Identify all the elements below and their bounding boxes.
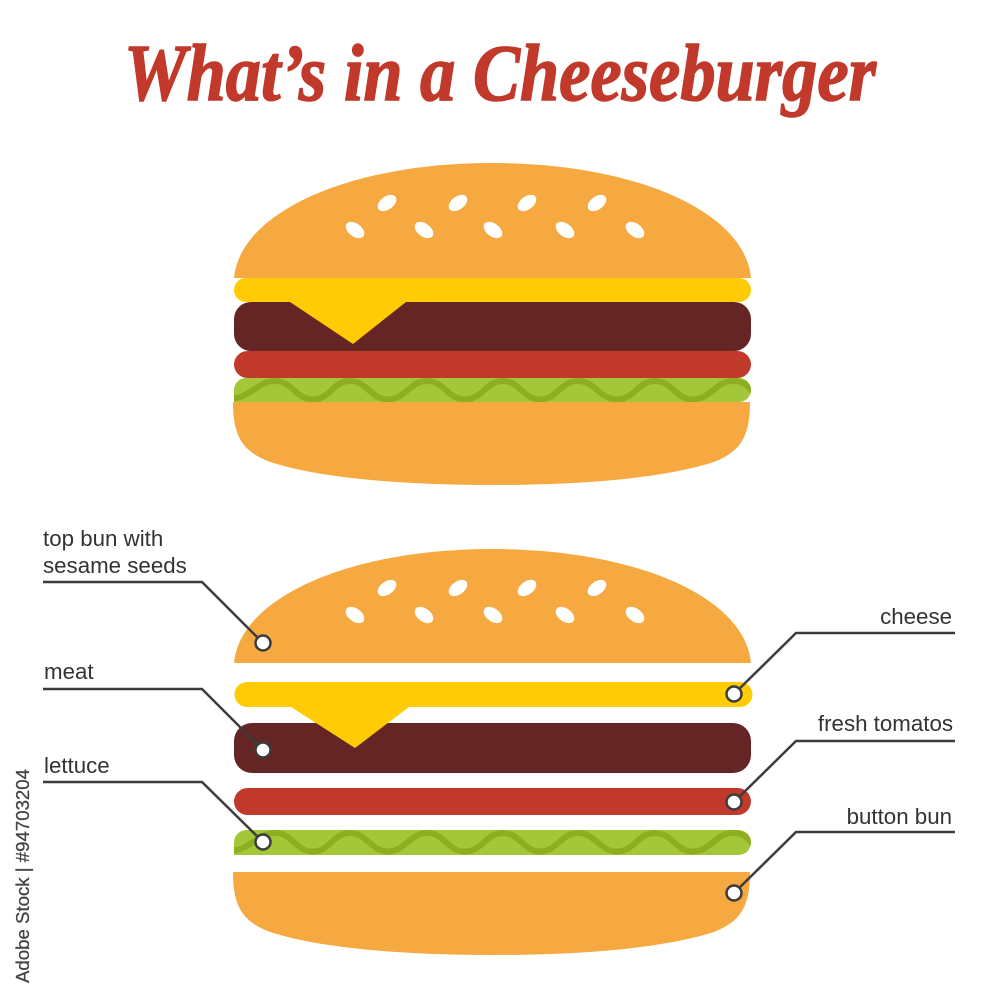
vertical credit line: Adobe Stock | #94703204	[13, 769, 33, 983]
callout: meat	[43, 659, 270, 758]
top bun with seeds	[234, 549, 751, 663]
callout: lettuce	[43, 753, 270, 850]
callout: fresh tomatos: fresh tomatos	[818, 711, 953, 736]
assembled burger	[230, 163, 756, 485]
bottom bun	[233, 872, 750, 955]
top bun with seeds	[234, 163, 751, 278]
title: What’s in a Cheeseburger	[124, 30, 877, 118]
meat patty	[234, 723, 751, 773]
callout: top bun with sesame seeds	[43, 526, 270, 650]
callout: button bun	[726, 804, 955, 900]
meat patty	[234, 302, 751, 351]
cheese slice	[234, 278, 751, 344]
tomato	[234, 351, 751, 378]
bottom bun	[233, 402, 750, 485]
callout: lettuce: lettuce	[44, 753, 110, 778]
callout: top bun with sesame seeds: top bun with	[43, 526, 163, 551]
callout: fresh tomatos	[726, 711, 955, 810]
callout: cheese: cheese	[880, 604, 952, 629]
tomato	[234, 788, 751, 815]
lettuce	[230, 830, 756, 855]
lettuce	[230, 378, 756, 402]
cheese slice	[234, 682, 752, 748]
callout: button bun: button bun	[847, 804, 952, 829]
callout: top bun with sesame seeds: sesame seeds	[43, 553, 187, 578]
exploded burger	[230, 549, 756, 955]
callout: cheese	[726, 604, 955, 702]
callout: meat: meat	[44, 659, 94, 684]
